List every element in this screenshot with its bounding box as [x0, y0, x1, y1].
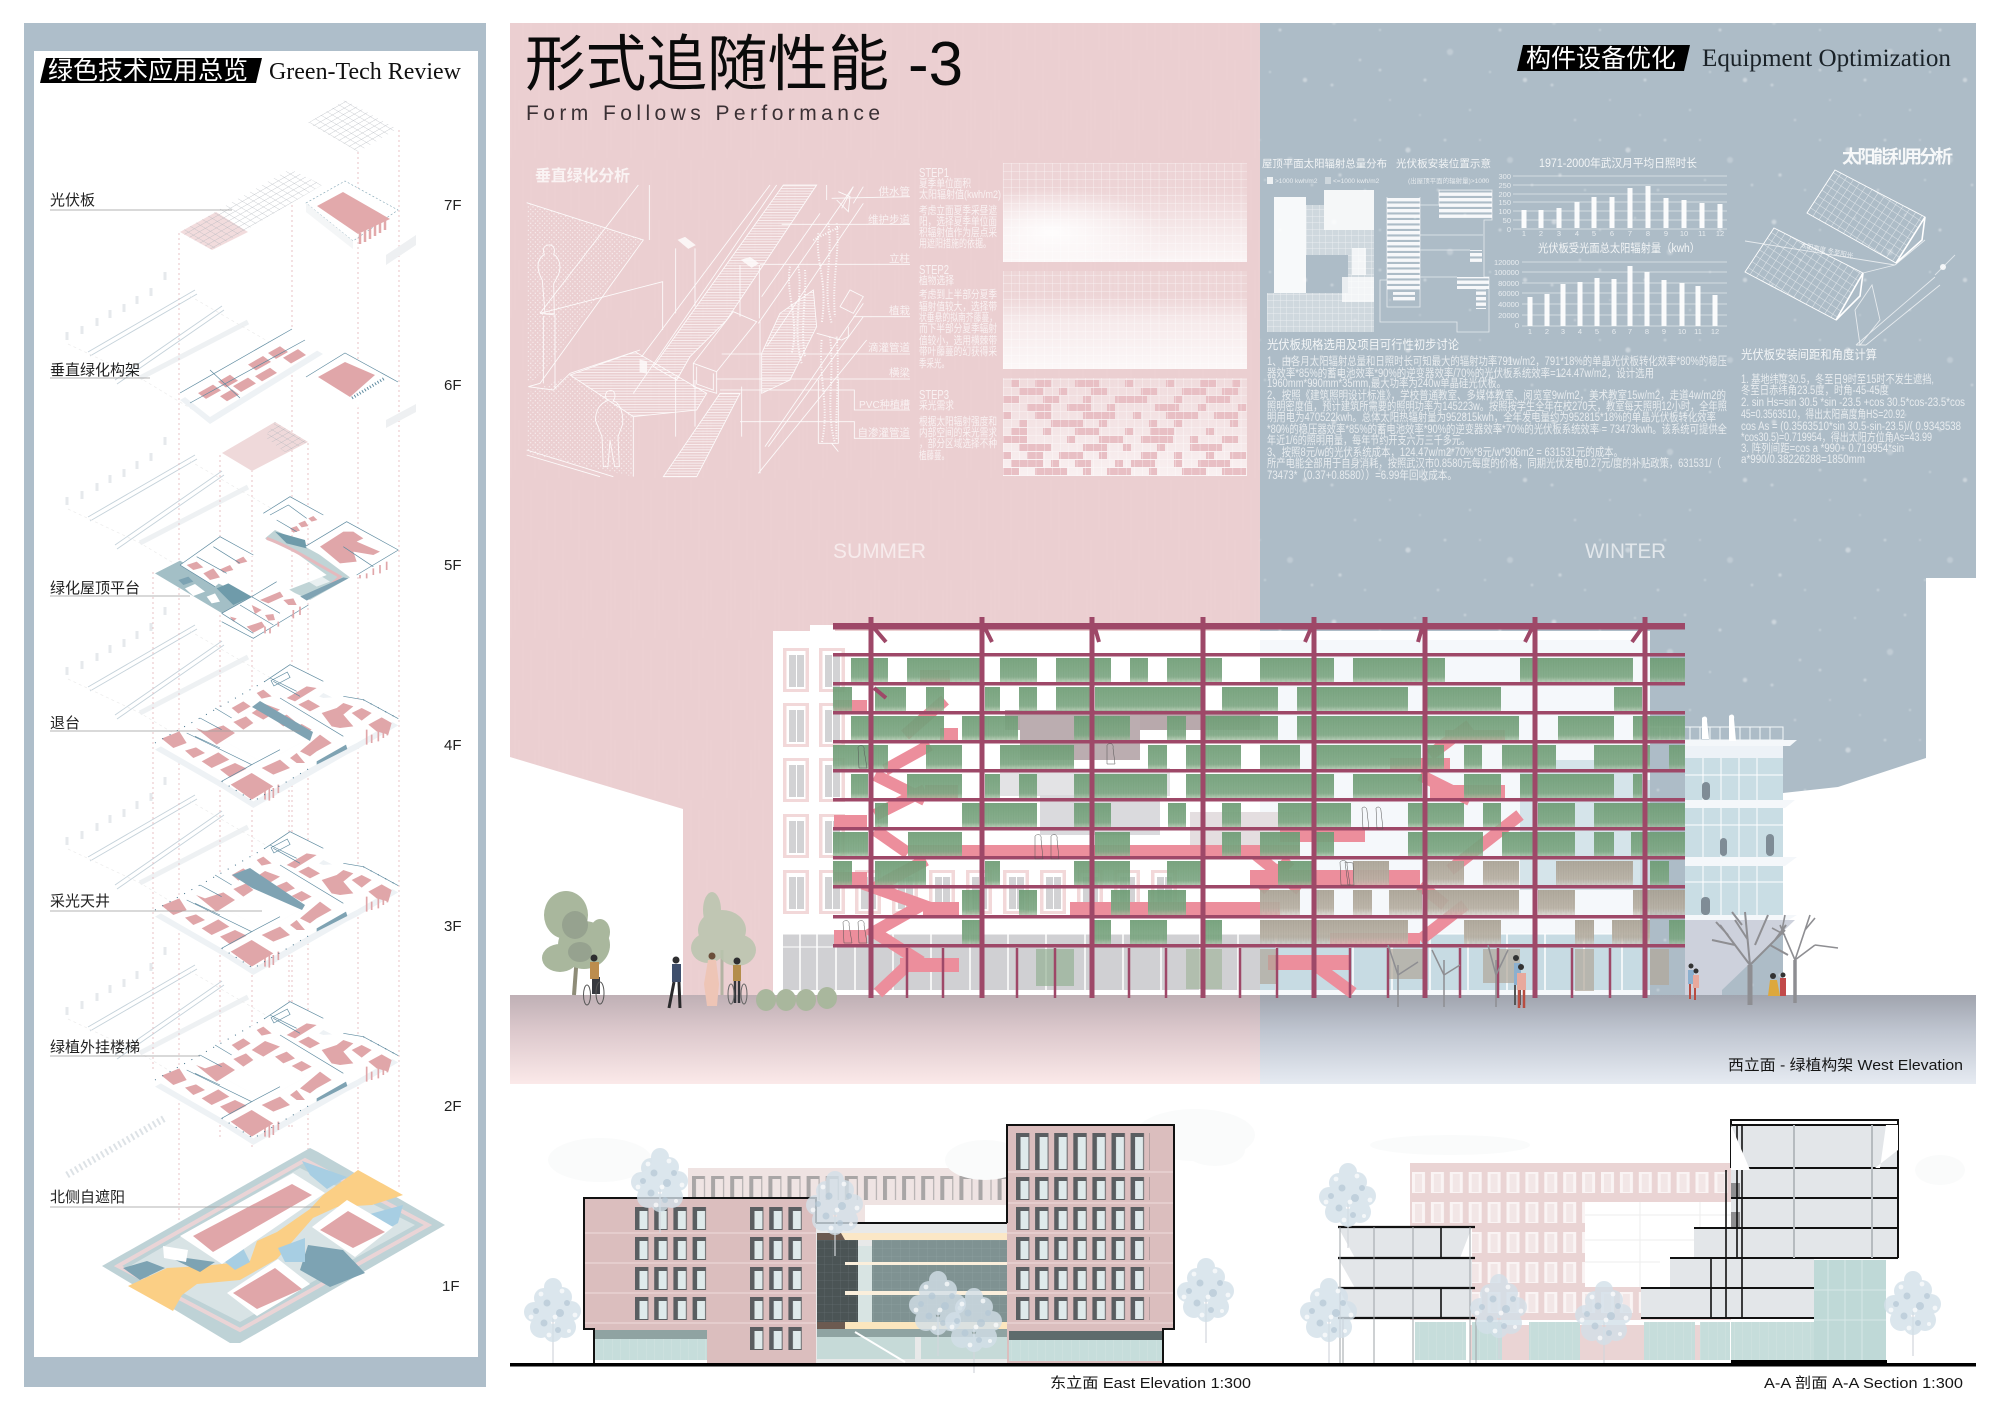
west elevation: building	[773, 617, 1797, 998]
diagram: panel angle and spacing: 太阳高度 冬至阳光	[1800, 240, 1855, 260]
text block: panel specification discussion	[1267, 337, 1727, 482]
step 2 text: STEP2	[919, 262, 949, 277]
panel: green-tech review	[24, 23, 486, 1387]
floor: 2F plan	[155, 1002, 398, 1145]
ground: winter	[1260, 995, 1976, 1084]
ground floor hanging vines	[1036, 949, 1669, 991]
text block: panel spacing calculation: *cos30.5)=0.719954，得出太阳方位角As=43.99	[1741, 430, 1932, 444]
facade wall	[773, 625, 1650, 995]
bar chart: monthly sunshine hours: 5	[1592, 229, 1596, 238]
heading: equipment optimization: Equipment Optimization	[1702, 45, 1951, 72]
section labels	[858, 185, 910, 439]
section labels: 供水管	[878, 185, 910, 198]
step 2 text: 考虑到上半部分夏季	[919, 287, 997, 301]
heading: green-tech review: 绿色技术应用总览	[48, 57, 248, 85]
caption: east elevation: 东立面 East Elevation 1:300	[1050, 1375, 1251, 1392]
facade windows	[783, 648, 1650, 950]
ground line	[510, 1363, 1976, 1366]
subtitle: Form Follows Performance	[526, 102, 880, 125]
bar chart: monthly sunshine hours: 8	[1646, 229, 1650, 238]
heading: equipment optimization	[1517, 45, 1951, 73]
step 3 text	[919, 387, 997, 462]
bar chart: monthly sunshine hours: 200	[1498, 190, 1511, 199]
dashed projection lines	[153, 130, 399, 1240]
bar chart: monthly sunshine hours: 50	[1503, 216, 1511, 225]
bar chart: panel solar radiation: 0	[1515, 321, 1519, 330]
hanging vines: withered	[1260, 861, 1685, 946]
floor: 4F plan	[155, 665, 398, 808]
text block: panel specification discussion: 照明密度值，预计建筑所需要的照明功率为145223w。按照按学生全年在校270天，教室每天照明12小时，全年照	[1267, 399, 1727, 413]
text block: panel spacing calculation: a*990/0.38226288=1850mm	[1741, 454, 1865, 466]
tower section	[1641, 1120, 1898, 1365]
step 3 text: STEP3	[919, 387, 949, 402]
bar chart: panel solar radiation: 40000	[1498, 300, 1519, 309]
title: 形式追随性能	[525, 30, 889, 98]
bar chart: monthly sunshine hours: 250	[1498, 181, 1511, 190]
bar chart: monthly sunshine hours: 300	[1498, 172, 1511, 181]
floor level labels: 4F	[444, 737, 462, 754]
step 1 text: 太阳辐射值(kwh/m2)	[919, 187, 1001, 201]
floor level labels: 2F	[444, 1098, 462, 1115]
rear building	[688, 1168, 1007, 1223]
bar chart: panel solar radiation: 3	[1561, 327, 1565, 336]
floor: 7F tower and photovoltaic roof	[180, 100, 416, 265]
panel placement plan	[1380, 157, 1492, 332]
bar chart: panel solar radiation: 12	[1711, 327, 1719, 336]
text: WINTER: WINTER	[1585, 540, 1666, 563]
heading: green-tech review	[40, 57, 461, 85]
hanging vines: green	[833, 658, 1685, 946]
text block: panel spacing calculation: 45=0.3563510，得出太阳高度角HS=20.92	[1741, 407, 1905, 421]
section labels: 立柱	[889, 252, 910, 265]
bar chart: panel solar radiation: 5	[1595, 327, 1599, 336]
step 2 text: 季采光。	[919, 356, 949, 370]
heat grid 1	[1003, 163, 1247, 262]
center glazed atrium	[816, 1223, 1007, 1363]
step 2 text: 值较小，选用横棘带	[919, 333, 997, 347]
step 3 text: 采光需求	[919, 398, 954, 412]
floor: 1F site plan	[102, 1148, 445, 1343]
outline figures on walkways	[843, 744, 1383, 943]
bar chart: panel solar radiation: 1	[1528, 327, 1532, 336]
text block: panel specification discussion: 器效率*85%的蓄电池效率*90%的逆变器效率/70%的光伏板系统效率=124.47w/m2，设计选用	[1267, 366, 1654, 380]
step 2 text	[919, 262, 997, 370]
bar chart: monthly sunshine hours: 0	[1507, 225, 1511, 234]
left section block	[1338, 1227, 1730, 1363]
bar chart: monthly sunshine hours: 10	[1680, 229, 1688, 238]
ghost structural layers	[67, 272, 300, 1175]
bar chart: panel solar radiation: 20000	[1498, 311, 1519, 320]
bar chart: monthly sunshine hours: 6	[1610, 229, 1614, 238]
heading: green-tech review: Green-Tech Review	[269, 58, 461, 85]
text block: panel spacing calculation: 冬至日赤纬角23.5度，时角-45-45度	[1741, 383, 1889, 397]
callout: green roof terrace: 绿化屋顶平台	[50, 580, 140, 597]
bar chart: monthly sunshine hours: 100	[1498, 207, 1511, 216]
section labels: 滴灌管道	[868, 341, 910, 354]
text block: panel spacing calculation: 光伏板安装间距和角度计算	[1741, 347, 1877, 362]
text block: panel specification discussion: 年近1/6的照明用量，每年节约开支六万三千多元。	[1267, 433, 1470, 447]
east elevation trees	[524, 1148, 1234, 1373]
step 2 text: 辐射值较大，选择带	[919, 299, 997, 313]
bar chart: panel solar radiation: 7	[1628, 327, 1632, 336]
text block: panel specification discussion: 1、由各月太阳辐射总量和日照时长可知最大的辐射功率791w/m2，791*18%的单晶光伏板转化效率*80%的稳压	[1267, 354, 1727, 368]
bar chart: monthly sunshine hours: 12	[1716, 229, 1724, 238]
step 1 text: 阳，选择夏季单位面	[919, 214, 997, 228]
heat grid 3	[1003, 378, 1247, 476]
bar chart: panel solar radiation: 4	[1578, 327, 1582, 336]
bar chart: monthly sunshine hours: 9	[1664, 229, 1668, 238]
stair landings and walkways	[834, 670, 1505, 972]
bar chart: panel solar radiation: 10	[1678, 327, 1686, 336]
section drawing: vertical greening system	[527, 185, 910, 477]
rear building in section	[1410, 1163, 1731, 1360]
text block: panel spacing calculation	[1741, 347, 1965, 466]
steel frame	[833, 617, 1685, 998]
section labels: 横梁	[889, 366, 910, 379]
callout: vertical green frame: 垂直绿化构架	[50, 362, 140, 379]
panel placement plan: (出屋顶平面的辐射量)>1000	[1408, 176, 1489, 185]
bar chart: monthly sunshine hours: 7	[1628, 229, 1632, 238]
text block: panel specification discussion: 所产电能全部用于自身消耗，按照武汉市0.8580元每度的价格，同期光伏发电0.27元/度的补贴政策，631531/（	[1267, 456, 1721, 470]
text block: panel spacing calculation: cos As = (0.3563510*sin 30.5-sin-23.5)/( 0.9343538	[1741, 421, 1961, 433]
text block: panel specification discussion: 73473*（0.37+0.8580））=6.99年回收成本。	[1267, 468, 1457, 482]
background: summer panel	[510, 23, 1260, 995]
step 1 text: STEP1	[919, 165, 949, 180]
caption: A-A section: A-A 剖面 A-A Section 1:300	[1764, 1375, 1963, 1392]
title: -3	[908, 30, 963, 99]
section labels: 植栽	[889, 304, 910, 317]
step 1 text: 用遮阳措施的依据。	[919, 236, 991, 250]
floor level labels: 7F	[444, 197, 462, 214]
left volume	[584, 1198, 816, 1363]
callout: photovoltaic panel: 光伏板	[50, 191, 95, 209]
floor level labels: 6F	[444, 377, 462, 394]
step 2 text: 而下半部分夏季辐射	[919, 321, 997, 335]
step 1 text: 积辐射值作为层点采	[919, 225, 997, 239]
step 3 text: 内部空间的采光需求	[919, 425, 997, 439]
ground floor glazing	[783, 934, 1650, 990]
ground: summer	[510, 995, 1260, 1084]
bar chart: panel solar radiation: 8	[1645, 327, 1649, 336]
text block: panel spacing calculation: 1. 基地纬度30.5，冬至日9时至15时不发生遮挡,	[1741, 372, 1934, 386]
roof radiation plan: <=1000 kwh/m2	[1333, 178, 1380, 185]
step 3 text: ，部分区域选择不种	[919, 436, 997, 450]
floor: 3F plan	[155, 832, 398, 975]
text block: panel specification discussion: 2、按照《建筑照明设计标准》，学校普通教室、多媒体教室、阅览室9w/m2，美术教室15w/m2，走道4w/m2的	[1267, 388, 1726, 402]
bar chart: panel solar radiation: 光伏板受光面总太阳辐射量（kwh）	[1538, 241, 1700, 255]
text block: panel specification discussion: *80%的稳压器效率*85%的蓄电池效率*90%的逆变器效率*70%的光伏板系统效率 = 73473kwh。该系统可提供全	[1267, 422, 1727, 436]
roof radiation plan	[1262, 157, 1387, 332]
heading: solar energy analysis: 太阳能利用分析	[1842, 147, 1953, 167]
heat grid 2	[1003, 271, 1247, 369]
callout: skylight courtyard: 采光天井	[50, 893, 110, 910]
step 1 text	[919, 165, 1001, 250]
bar chart: monthly sunshine hours: 4	[1575, 229, 1579, 238]
bar chart: panel solar radiation: 120000	[1494, 258, 1519, 267]
callout: setback terrace: 退台	[50, 715, 80, 732]
section trees	[1300, 1163, 1941, 1366]
winter people	[1513, 955, 1786, 1008]
roof radiation plan: >1000 kwh/m2	[1275, 178, 1318, 185]
roof radiation plan: 屋顶平面太阳辐射总量分布	[1262, 157, 1387, 170]
text block: panel specification discussion: 3、按照8元/w的光伏系统成本，124.47w/m2*70%*8元/w*906m2 = 631531元的成本。	[1267, 445, 1623, 459]
step 2 text: 状垂悬的拟南芥藤蔓，	[919, 310, 997, 324]
diagram: panel angle and spacing	[1745, 170, 1955, 345]
floor level labels: 3F	[444, 918, 462, 935]
east annex glass block	[1650, 715, 1797, 995]
section labels: PVC种植槽	[859, 398, 910, 411]
bar chart: monthly sunshine hours: 2	[1539, 229, 1543, 238]
callout: green external stair: 绿植外挂楼梯	[50, 1039, 140, 1056]
floor level labels	[442, 197, 462, 1295]
text: SUMMER: SUMMER	[833, 540, 926, 563]
text block: panel specification discussion: 明用电为470522kwh。总体太阳热辐射量为952815kwh，全年发电量约为952815*18%的单晶光伏板转化效率	[1267, 410, 1716, 424]
pale clouds	[1370, 1135, 1965, 1185]
bar chart: panel solar radiation: 100000	[1494, 268, 1519, 277]
step 2 text: 植物选择	[919, 273, 954, 287]
heading: vertical greening analysis: 垂直绿化分析	[535, 166, 630, 185]
bar chart: monthly sunshine hours	[1498, 156, 1727, 238]
heading: equipment optimization: 构件设备优化	[1526, 45, 1676, 73]
bar chart: panel solar radiation: 11	[1694, 327, 1702, 336]
step 3 text: 植藤蔓。	[919, 448, 949, 462]
bar chart: monthly sunshine hours: 11	[1698, 229, 1706, 238]
bar chart: monthly sunshine hours: 150	[1498, 198, 1511, 207]
bar chart: monthly sunshine hours: 3	[1557, 229, 1561, 238]
background: winter panel	[1260, 23, 1976, 995]
text block: panel spacing calculation: 3. 阵列间距=cos a *990+ 0.719954*sin	[1741, 441, 1904, 455]
pale clouds	[548, 1109, 1255, 1182]
bar chart: panel solar radiation: 80000	[1498, 279, 1519, 288]
bar chart: panel solar radiation: 2	[1545, 327, 1549, 336]
floor level labels: 1F	[442, 1278, 460, 1295]
text block: panel specification discussion: 光伏板规格选用及项目可行性初步讨论	[1267, 337, 1459, 352]
summer trees	[542, 891, 756, 995]
floor: 6F plan	[180, 329, 416, 428]
right tower	[1007, 1125, 1174, 1363]
bar chart: monthly sunshine hours: 1	[1522, 229, 1526, 238]
bar chart: panel solar radiation	[1494, 241, 1727, 336]
bar chart: monthly sunshine hours: 1971-2000年武汉月平均日照时长	[1539, 156, 1697, 170]
external pink stairs	[874, 700, 1520, 993]
caption: west elevation: 西立面 - 绿植构架 West Elevation	[1728, 1057, 1963, 1074]
bar chart: panel solar radiation: 60000	[1498, 289, 1519, 298]
text block: panel specification discussion: 1960mm*990mm*35mm,最大功率为240w单晶硅光伏板。	[1267, 376, 1506, 390]
step 1 text: 夏季单位面积	[919, 176, 971, 190]
panel placement plan: 光伏板安装位置示意	[1396, 157, 1491, 170]
winter trees	[1388, 912, 1838, 1007]
floor level labels: 5F	[444, 557, 462, 574]
callout: green roof terrace	[50, 580, 190, 597]
section labels: 自渗灌管道	[858, 426, 910, 439]
section labels: 维护步道	[868, 213, 910, 226]
bar chart: panel solar radiation: 6	[1612, 327, 1616, 336]
summer pedestrians and bikes	[584, 952, 837, 1011]
callout: north self-shading: 北侧自遮阳	[50, 1189, 125, 1206]
step 3 text: 根据太阳辐射强度和	[919, 414, 997, 428]
bar chart: panel solar radiation: 9	[1662, 327, 1666, 336]
section drawing A-A	[1300, 1120, 1965, 1366]
east elevation drawing	[524, 1109, 1255, 1373]
step 1 text: 考虑立面夏季采昼遮	[919, 203, 997, 217]
floor: 5F plan and terraces	[155, 422, 398, 638]
step 2 text: 带叶藤蔓的幻获得采	[919, 344, 997, 358]
